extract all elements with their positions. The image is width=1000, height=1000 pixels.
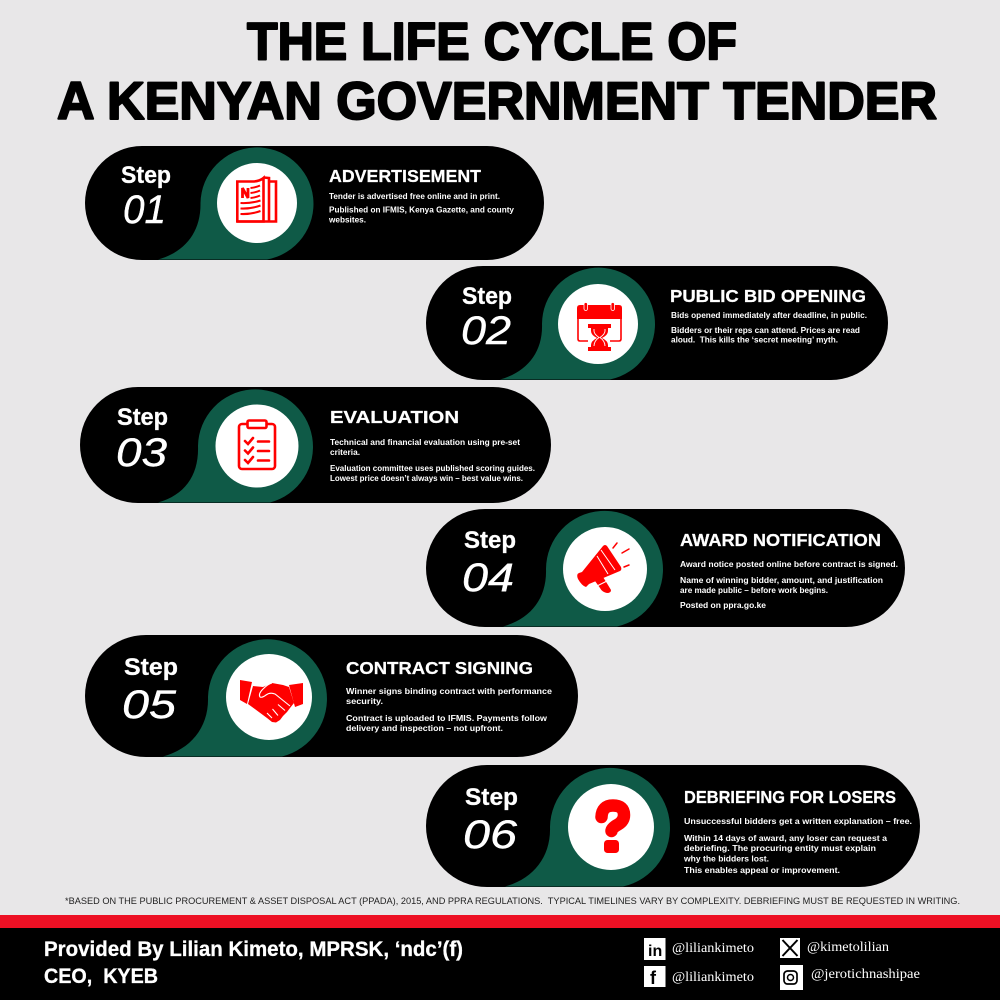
title	[57, 13, 937, 131]
social: facebook	[644, 966, 754, 988]
title: A KENYAN GOVERNMENT TENDER	[57, 72, 937, 131]
panel: step 02 public bid opening: 02	[461, 309, 511, 353]
panel: step 02 public bid opening	[426, 266, 888, 380]
footnote: *BASED ON THE PUBLIC PROCUREMENT & ASSET DISPOSAL ACT (PPADA), 2015, AND PPRA REGULATIONS. TYPICAL TIMELINES VARY BY COMPLEXITY. DEBRIEFING MUST BE REQUESTED IN WRITING.	[65, 896, 960, 907]
text block	[346, 686, 552, 733]
footer credit	[44, 938, 463, 988]
text block: Bids opened immediately after deadline, in public.	[671, 310, 867, 320]
social: x	[780, 938, 889, 958]
footer credit: Provided By Lilian Kimeto, MPRSK, ‘ndc’(f)	[44, 938, 463, 961]
text block: Within 14 days of award, any loser can request a	[684, 833, 887, 843]
social: instagram	[780, 965, 920, 990]
text block: This enables appeal or improvement.	[684, 865, 840, 875]
panel: step 06 debriefing for losers	[426, 765, 920, 887]
text block: why the bidders lost.	[683, 854, 769, 864]
panel: step 03 evaluation	[80, 387, 551, 503]
panel: step 02 public bid opening: Step	[462, 283, 512, 310]
panel: step 04 award notification	[426, 509, 905, 627]
footer credit: CEO, KYEB	[44, 965, 158, 988]
text block: Tender is advertised free online and in print.	[329, 191, 500, 201]
panel: step 06 debriefing for losers: Step	[465, 784, 518, 811]
panel: step 06 debriefing for losers: 06	[463, 813, 518, 857]
text block: Published on IFMIS, Kenya Gazette, and county	[329, 204, 514, 214]
panel: step 01 advertisement: 01	[123, 188, 166, 232]
heading: AWARD NOTIFICATION	[680, 530, 881, 550]
text block: websites.	[328, 214, 366, 224]
social: linkedin: @liliankimeto	[672, 940, 754, 955]
social: linkedin	[644, 938, 754, 960]
panel: step 04 award notification: 04	[462, 556, 514, 600]
icon: calendar with hourglass	[577, 302, 622, 351]
text block: Unsuccessful bidders get a written explanation – free.	[684, 816, 912, 826]
heading: CONTRACT SIGNING	[346, 658, 533, 678]
social: facebook: @liliankimeto	[672, 969, 754, 984]
text block: aloud. This kills the ‘secret meeting’ myth.	[671, 334, 838, 344]
text block: Winner signs binding contract with performance	[346, 686, 552, 696]
panel: step 05 contract signing	[85, 635, 578, 757]
text block: security.	[346, 696, 383, 706]
panel: step 03 evaluation: 03	[116, 431, 167, 475]
icon: question mark	[602, 806, 624, 853]
icon: newspaper	[237, 178, 276, 222]
text block: Technical and financial evaluation using pre-set	[330, 437, 520, 447]
text block: Name of winning bidder, amount, and justification	[680, 575, 883, 585]
text block: Bidders or their reps can attend. Prices are read	[671, 325, 860, 335]
text block: are made public – before work begins.	[680, 585, 828, 595]
text block: Posted on ppra.go.ke	[680, 600, 766, 610]
heading: DEBRIEFING FOR LOSERS	[684, 787, 896, 807]
panel: step 05 contract signing: 05	[122, 683, 177, 727]
heading: ADVERTISEMENT	[329, 166, 481, 186]
icon: clipboard checklist	[239, 420, 275, 469]
text block: Evaluation committee uses published scoring guides.	[330, 463, 535, 473]
text block: Award notice posted online before contract is signed.	[680, 559, 898, 569]
social: linkedin: in	[648, 943, 662, 960]
panel: step 05 contract signing: Step	[124, 654, 178, 681]
panel: step 01 advertisement: Step	[121, 162, 171, 189]
icon: handshake	[240, 680, 303, 722]
text block	[680, 559, 898, 610]
text block: delivery and inspection – not upfront.	[346, 723, 503, 733]
social: facebook: f	[650, 968, 657, 988]
heading: EVALUATION	[330, 407, 459, 427]
heading: PUBLIC BID OPENING	[670, 286, 866, 306]
footer band	[0, 915, 1000, 1000]
social: x: @kimetolilian	[807, 939, 889, 954]
text block	[683, 816, 912, 875]
text block	[330, 437, 535, 483]
text block: Lowest price doesn’t always win – best value wins.	[330, 473, 523, 483]
social: instagram: @jerotichnashipae	[811, 966, 920, 981]
panel: step 03 evaluation: Step	[117, 404, 168, 431]
text block: criteria.	[330, 447, 360, 457]
text block: debriefing. The procuring entity must explain	[684, 843, 876, 853]
panel: step 01 advertisement	[85, 146, 544, 260]
text block: Contract is uploaded to IFMIS. Payments follow	[346, 713, 547, 723]
text block	[671, 310, 867, 344]
text block	[328, 191, 514, 224]
panel: step 04 award notification: Step	[464, 527, 516, 554]
title: THE LIFE CYCLE OF	[247, 13, 737, 72]
icon: megaphone	[577, 543, 629, 593]
